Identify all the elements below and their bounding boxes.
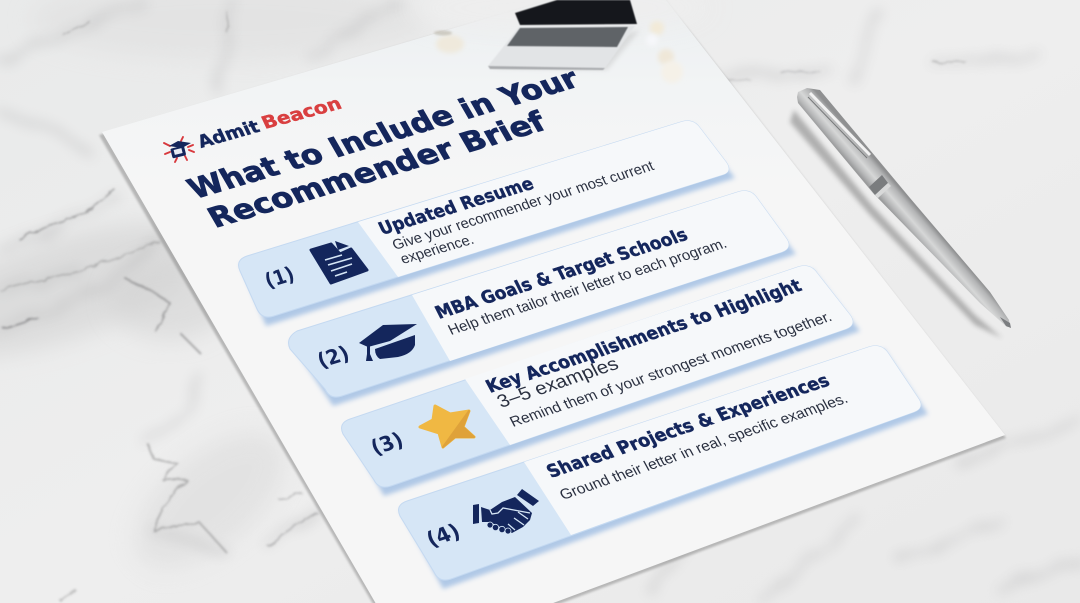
panel: card 3 key accomplishments [342, 266, 860, 496]
panel: card 2 MBA goals [289, 191, 796, 406]
description: MBA goals: Help them tailor their letter to each program. [445, 235, 730, 339]
label: number 1: (1) [261, 262, 298, 293]
heading: updated resume: Updated Resume [375, 174, 537, 239]
icon: graduation cap [359, 324, 417, 361]
logo [164, 94, 345, 162]
brand name: Admit: Admit [194, 117, 263, 152]
label: number 4: (4) [422, 519, 464, 551]
description: updated resume: experience. [398, 232, 477, 268]
description: key accomplishments: Remind them of your strongest moments together. [507, 309, 835, 431]
icon: document [311, 241, 367, 283]
laptop and background blur [410, 0, 710, 83]
pen [790, 88, 1011, 338]
label: number 2: (2) [314, 341, 353, 373]
label: number 3: (3) [367, 428, 407, 460]
subheading: 3-5 examples: 3–5 examples [493, 353, 622, 412]
description: updated resume: Give your recommender your most current [390, 158, 657, 254]
heading: MBA goals: MBA Goals & Target Schools [432, 225, 691, 323]
icon: star [420, 406, 474, 447]
brand name: Beacon: Beacon [258, 94, 345, 133]
title: What to Include in Your [182, 62, 585, 205]
heading: shared projects: Shared Projects & Experiences [543, 371, 833, 482]
heading: key accomplishments: Key Accomplishments to Highlight [483, 276, 805, 397]
description: shared projects: Ground their letter in real, specific examples. [557, 391, 851, 503]
panel: card 4 shared projects [399, 346, 928, 589]
icon: beacon graduation cap [164, 137, 194, 162]
title: Recommender Brief [202, 105, 552, 234]
panel: card 1 updated resume [239, 121, 735, 326]
icon: handshake [473, 489, 539, 534]
